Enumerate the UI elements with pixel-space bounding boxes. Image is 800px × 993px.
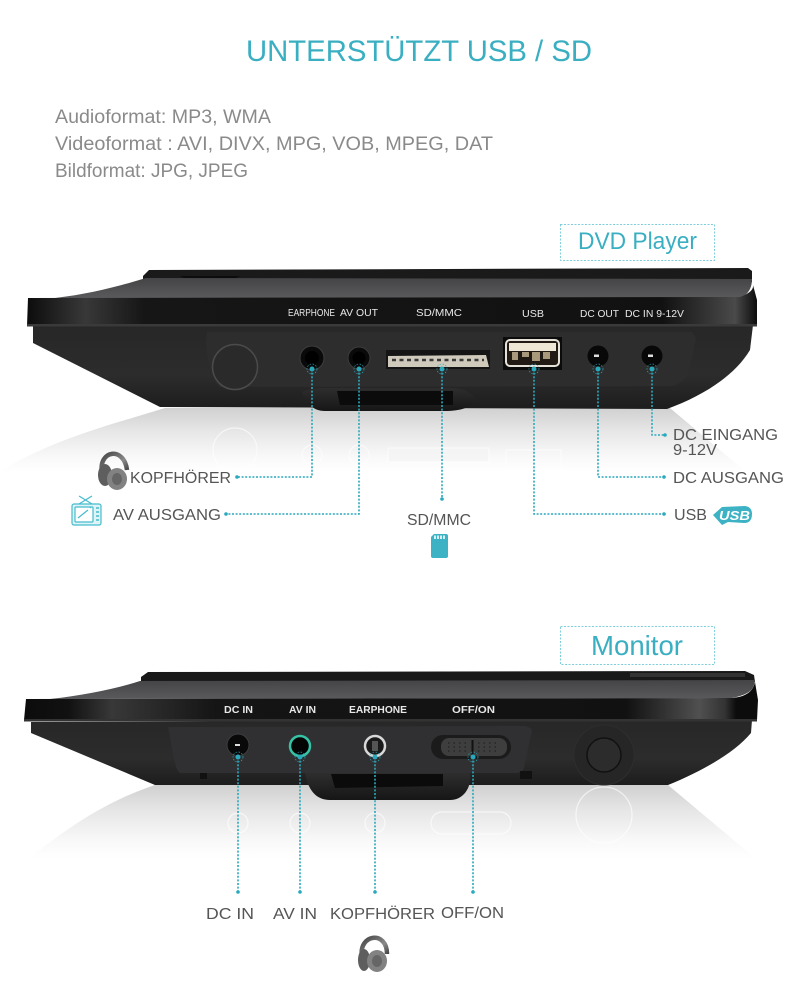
earphone port xyxy=(365,736,385,756)
front band xyxy=(27,285,757,326)
text block: supported formats: Bildformat: JPG, JPEG xyxy=(55,161,248,182)
grey top wedge xyxy=(55,278,752,298)
stand clip xyxy=(302,388,477,411)
port panel xyxy=(168,726,532,773)
device labels: DC OUT xyxy=(580,309,619,320)
screws xyxy=(200,771,532,779)
label: DC Eingang xyxy=(673,427,778,459)
icon: USB badge xyxy=(713,506,752,525)
label: DC Eingang: DC EINGANG xyxy=(673,427,778,444)
title: UNTERSTÜTZT USB / SD xyxy=(246,35,592,68)
icon: headphones xyxy=(98,454,127,490)
text block: supported formats xyxy=(55,107,493,182)
label: DC Ausgang: DC AUSGANG xyxy=(673,470,784,487)
AV out port xyxy=(348,347,370,369)
callout lines: DVD player xyxy=(224,364,667,516)
stand clip xyxy=(305,773,470,800)
callout lines: Monitor xyxy=(233,752,478,894)
earphone port xyxy=(300,346,324,370)
DC in port xyxy=(642,346,662,366)
label: Kopfhörer: KOPFHÖRER xyxy=(330,905,435,923)
label: DC Eingang: 9-12V xyxy=(673,442,717,459)
text block: supported formats: Audioformat: MP3, WMA xyxy=(55,107,271,128)
device labels: DC IN 9-12V xyxy=(625,309,684,320)
front band xyxy=(24,682,758,720)
reflection under monitor xyxy=(30,785,755,858)
device labels: USB xyxy=(522,309,544,320)
device labels: EARPHONE xyxy=(349,705,407,716)
icon: USB badge: USB xyxy=(719,508,750,523)
label: AV In: AV IN xyxy=(273,906,317,923)
AV in port xyxy=(290,736,310,756)
round button xyxy=(574,725,634,785)
panel: Monitor heading: Monitor xyxy=(591,630,683,661)
panel: Monitor heading xyxy=(560,626,714,664)
label: AV Ausgang: AV AUSGANG xyxy=(113,507,221,524)
lower body xyxy=(33,325,753,409)
icon: TV xyxy=(72,496,101,525)
label: DC In: DC IN xyxy=(206,906,254,923)
reflection under DVD player xyxy=(0,408,746,472)
SD card slot xyxy=(386,350,490,369)
device labels: OFF/ON xyxy=(452,705,495,716)
round button xyxy=(212,344,258,390)
device labels xyxy=(288,308,684,320)
device labels: SD/MMC xyxy=(416,308,462,319)
panel: Monitor device photo xyxy=(24,671,758,858)
label: Kopfhörer: KOPFHÖRER xyxy=(130,469,231,487)
DC in port xyxy=(227,734,249,756)
text block: supported formats: Videoformat : AVI, DIVX, MPG, VOB, MPEG, DAT xyxy=(55,134,493,155)
DC out port xyxy=(588,346,608,366)
device labels: AV IN xyxy=(289,705,316,716)
grey top wedge xyxy=(50,680,755,699)
power slider xyxy=(431,735,511,759)
device labels: DC IN xyxy=(224,705,253,716)
USB port xyxy=(503,337,562,370)
lid xyxy=(141,671,755,682)
device labels: AV OUT xyxy=(340,308,378,319)
label: SD/MMC: SD/MMC xyxy=(407,512,471,529)
lower body xyxy=(31,720,752,785)
device labels: EARPHONE xyxy=(288,308,335,319)
device labels xyxy=(224,705,495,716)
label: USB: USB xyxy=(674,507,707,524)
panel: DVD Player heading: DVD Player xyxy=(578,228,697,255)
panel: DVD Player heading xyxy=(560,224,714,260)
icon: SD card xyxy=(431,534,448,558)
lid xyxy=(143,268,752,282)
port panel xyxy=(206,332,696,387)
label: Off/On: OFF/ON xyxy=(441,905,504,922)
panel: DVD player device photo xyxy=(0,268,757,472)
icon: headphones xyxy=(358,938,387,972)
